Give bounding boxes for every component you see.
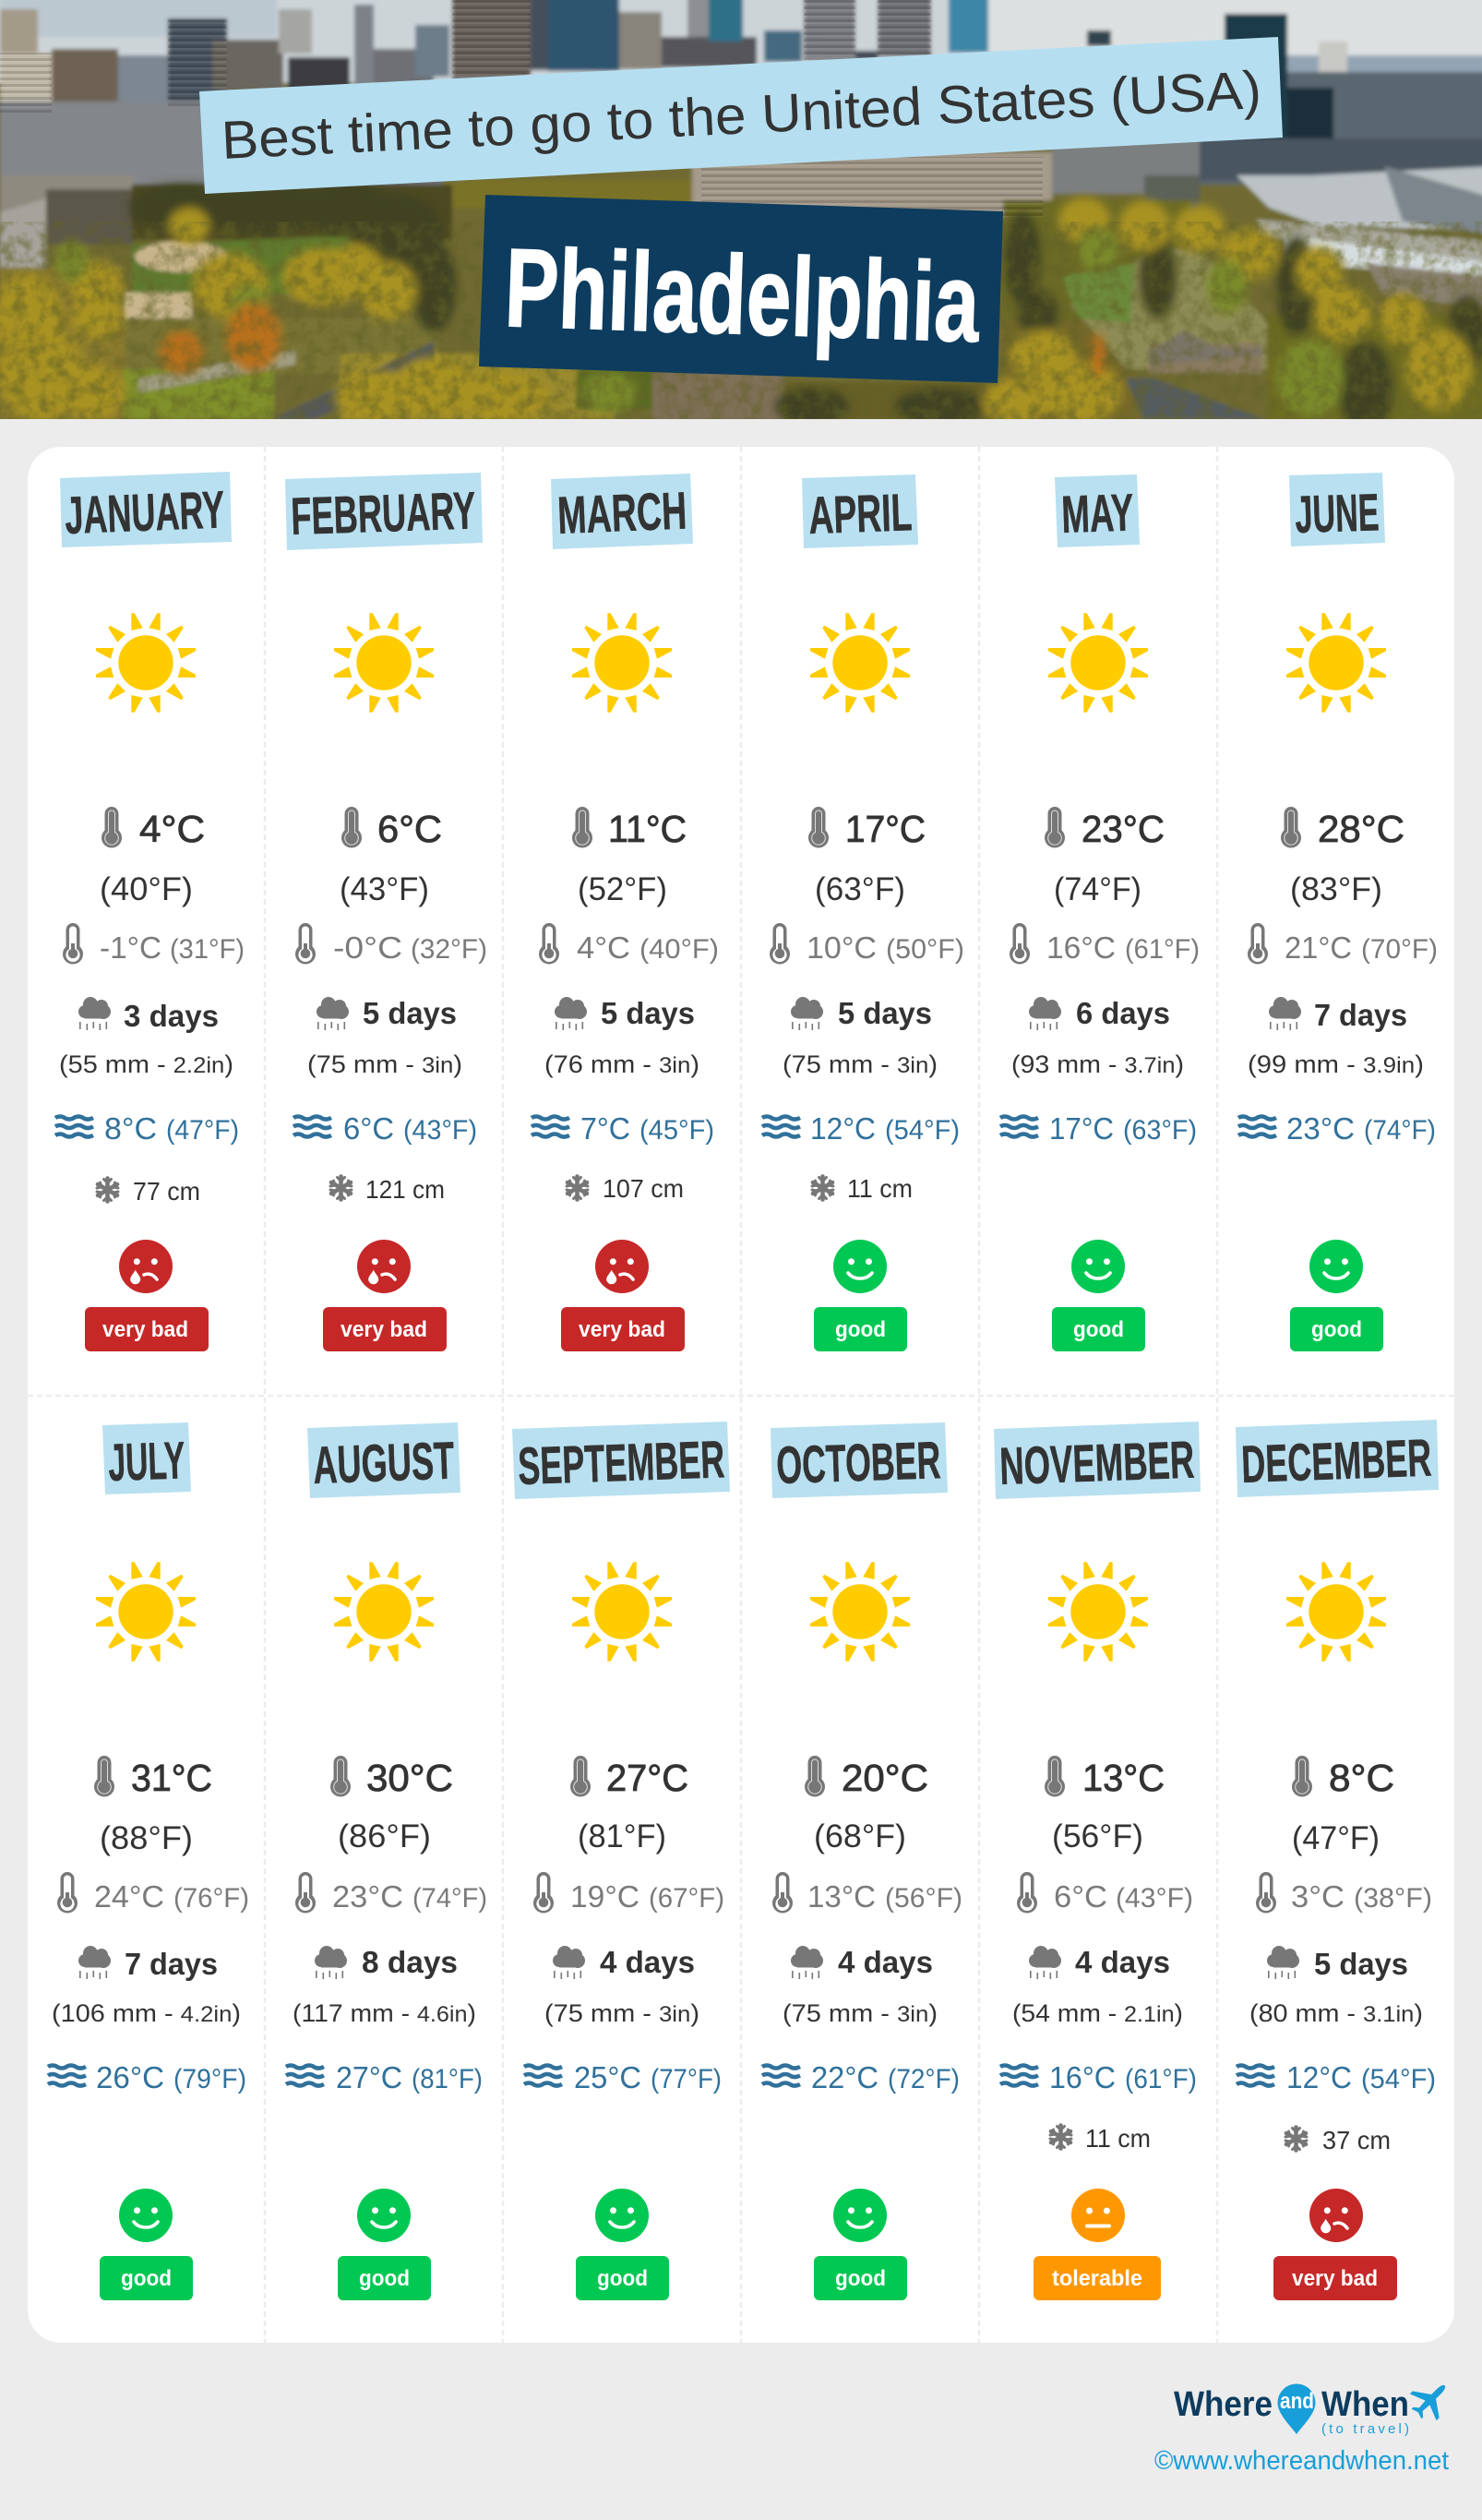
rainfall — [1249, 1946, 1423, 2027]
rating: very bad — [323, 1240, 447, 1351]
average temperature: 28°C — [1318, 808, 1404, 850]
sea temperature: (43°F) — [403, 1115, 477, 1146]
rainfall: (106 mm - 4.2in) — [52, 1999, 241, 2027]
rating: good: good — [1073, 1317, 1124, 1342]
sea temperature: (81°F) — [412, 2064, 483, 2094]
minimum temperature: (31°F) — [170, 934, 245, 965]
icon: sun — [96, 1562, 196, 1662]
rainfall: (117 mm - 4.6in) — [293, 1999, 476, 2027]
icon: sun — [810, 1562, 910, 1662]
icon: sun — [810, 613, 910, 713]
title banner — [199, 37, 1283, 194]
average temperature — [340, 807, 442, 907]
rating: very bad: very bad — [579, 1317, 665, 1342]
month label: May — [1055, 474, 1140, 547]
minimum temperature — [770, 923, 964, 965]
snowfall — [330, 1175, 445, 1204]
sea temperature: 12°C — [1286, 2060, 1352, 2094]
rainfall: (54 mm - 2.1in) — [1012, 1999, 1183, 2027]
minimum temperature: (56°F) — [885, 1883, 962, 1914]
rainfall — [1011, 996, 1184, 1078]
sea temperature — [55, 1111, 239, 1146]
minimum temperature — [57, 1872, 249, 1914]
average temperature: 6°C — [377, 808, 442, 850]
month label: September: SEPTEMBER — [517, 1430, 725, 1496]
snowfall: 121 cm — [365, 1175, 445, 1204]
minimum temperature — [1256, 1872, 1432, 1914]
rating: good — [576, 2189, 669, 2300]
rainfall — [783, 1945, 938, 2027]
sea temperature — [48, 2060, 246, 2094]
rating: good — [100, 2189, 193, 2300]
logo: Where and When (to travel) — [1174, 2372, 1458, 2437]
average temperature — [100, 807, 205, 907]
minimum temperature: (67°F) — [649, 1883, 724, 1914]
month: November — [994, 1422, 1201, 2300]
snowfall — [567, 1174, 684, 1203]
rating: very bad — [1273, 2189, 1397, 2300]
sea temperature: (45°F) — [639, 1115, 714, 1146]
minimum temperature: (70°F) — [1361, 934, 1438, 965]
minimum temperature: (40°F) — [639, 934, 719, 965]
logo: Where and When (to travel): When — [1321, 2385, 1409, 2424]
rainfall — [52, 1946, 241, 2027]
rainfall: (80 mm - 3.1in) — [1249, 1999, 1423, 2027]
minimum temperature: 23°C — [332, 1879, 403, 1914]
average temperature — [94, 1756, 212, 1856]
sea temperature — [286, 2060, 483, 2094]
sea temperature — [762, 2060, 960, 2094]
average temperature: 8°C — [1329, 1757, 1394, 1799]
average temperature: 17°C — [845, 808, 926, 850]
minimum temperature: (43°F) — [1116, 1883, 1193, 1914]
rainfall — [783, 996, 938, 1078]
city name banner — [479, 195, 1003, 383]
month label: July — [102, 1422, 191, 1494]
rating: good: good — [1311, 1317, 1362, 1342]
rainfall: 4 days — [838, 1945, 933, 1979]
rating: very bad: very bad — [1292, 2266, 1378, 2291]
rating: very bad — [561, 1240, 685, 1351]
month: August — [286, 1422, 487, 2300]
sea temperature: 27°C — [336, 2060, 402, 2094]
month: July — [48, 1422, 249, 2300]
rating: good — [814, 1240, 907, 1351]
rating: very bad: very bad — [102, 1317, 188, 1342]
rainfall: (93 mm - 3.7in) — [1011, 1050, 1184, 1078]
average temperature — [330, 1756, 453, 1854]
sea temperature: 16°C — [1049, 2060, 1116, 2094]
average temperature: (63°F) — [815, 870, 905, 907]
sea temperature: (79°F) — [173, 2064, 246, 2094]
icon: sun — [1048, 613, 1148, 713]
rating: tolerable — [1034, 2189, 1161, 2300]
rainfall: 7 days — [1314, 998, 1407, 1032]
month: June — [1238, 473, 1438, 1351]
sea temperature: (54°F) — [885, 1115, 960, 1146]
icon: sun — [334, 613, 434, 713]
rating: tolerable: tolerable — [1052, 2266, 1142, 2291]
average temperature: 11°C — [608, 808, 687, 850]
snowfall — [1285, 2126, 1391, 2154]
minimum temperature: (74°F) — [412, 1883, 487, 1914]
rating: good: good — [597, 2266, 648, 2291]
minimum temperature: -0°C — [333, 930, 402, 965]
snowfall — [97, 1177, 200, 1206]
minimum temperature — [295, 1872, 487, 1914]
rainfall: 5 days — [1314, 1947, 1408, 1981]
minimum temperature — [295, 923, 487, 965]
month label: March: MARCH — [556, 481, 687, 546]
rating: very bad: very bad — [341, 1317, 427, 1342]
month label: September — [512, 1422, 730, 1499]
rainfall: (55 mm - 2.2in) — [59, 1050, 233, 1078]
month: March — [532, 474, 719, 1351]
sea temperature: (74°F) — [1364, 1115, 1436, 1146]
sea temperature: 7°C — [580, 1111, 630, 1146]
rainfall: (76 mm - 3in) — [544, 1050, 699, 1078]
header photo: Philadelphia skyline and parkland — [0, 0, 1482, 434]
minimum temperature: (50°F) — [886, 934, 964, 965]
snowfall: 11 cm — [847, 1174, 913, 1203]
rainfall: 8 days — [362, 1945, 458, 1979]
rainfall — [544, 996, 699, 1078]
month label: August — [307, 1422, 460, 1498]
month label: October — [771, 1422, 948, 1498]
minimum temperature: (38°F) — [1354, 1883, 1432, 1914]
average temperature: (81°F) — [578, 1818, 666, 1854]
sea temperature — [762, 1111, 960, 1146]
sea temperature — [532, 1111, 714, 1146]
sea temperature: 26°C — [96, 2060, 164, 2094]
snowfall: 77 cm — [133, 1177, 200, 1206]
minimum temperature: 6°C — [1054, 1879, 1107, 1914]
rainfall: (75 mm - 3in) — [783, 1050, 938, 1078]
month: May — [1000, 474, 1200, 1351]
sea temperature: (63°F) — [1123, 1115, 1197, 1146]
rainfall: 3 days — [124, 999, 219, 1033]
month label: February: FEBRUARY — [290, 481, 476, 546]
month label: March — [551, 474, 693, 549]
minimum temperature: 13°C — [807, 1879, 876, 1914]
minimum temperature — [772, 1872, 962, 1914]
average temperature: 31°C — [131, 1757, 212, 1799]
minimum temperature: 21°C — [1285, 930, 1352, 965]
month label: May: MAY — [1060, 483, 1134, 545]
sea temperature — [293, 1111, 477, 1146]
snowfall — [1050, 2124, 1151, 2153]
rainfall: (75 mm - 3in) — [783, 1999, 938, 2027]
rainfall: (99 mm - 3.9in) — [1248, 1050, 1424, 1078]
average temperature: 27°C — [606, 1757, 688, 1799]
rating: good — [814, 2189, 907, 2300]
average temperature: 20°C — [842, 1757, 928, 1799]
sea temperature: (61°F) — [1125, 2064, 1197, 2094]
minimum temperature: -1°C — [100, 930, 161, 965]
rainfall: 5 days — [363, 996, 457, 1030]
title banner: Best time to go to the United States (USA) — [220, 60, 1262, 171]
minimum temperature: 4°C — [577, 930, 630, 965]
minimum temperature: 19°C — [570, 1879, 639, 1914]
month: December — [1236, 1420, 1439, 2300]
minimum temperature: 10°C — [807, 930, 877, 965]
rating: very bad — [85, 1240, 209, 1351]
rainfall: 6 days — [1076, 996, 1170, 1030]
average temperature: (43°F) — [340, 870, 429, 907]
sea temperature: (77°F) — [651, 2064, 722, 2094]
minimum temperature: (32°F) — [411, 934, 487, 965]
icon: sun — [1286, 1562, 1386, 1662]
average temperature: (52°F) — [578, 870, 667, 907]
copyright url: ©www.whereandwhen.net — [1154, 2446, 1449, 2476]
icon: sun — [1286, 613, 1386, 713]
month label: January: JANUARY — [64, 480, 225, 546]
average temperature: (74°F) — [1054, 870, 1141, 907]
average temperature: (88°F) — [100, 1819, 193, 1856]
average temperature — [572, 807, 687, 907]
average temperature: (68°F) — [814, 1818, 906, 1854]
month label: April: APRIL — [807, 483, 913, 546]
sea temperature: (47°F) — [166, 1115, 239, 1146]
snowfall: 107 cm — [603, 1174, 684, 1203]
month: April — [762, 474, 964, 1351]
rainfall: 5 days — [838, 996, 932, 1030]
logo: Where and When (to travel): and — [1280, 2389, 1314, 2414]
minimum temperature: 16°C — [1046, 930, 1116, 965]
minimum temperature — [533, 1872, 724, 1914]
average temperature: (83°F) — [1290, 870, 1382, 907]
minimum temperature — [63, 923, 245, 965]
minimum temperature — [1017, 1872, 1193, 1914]
rating: good: good — [359, 2266, 410, 2291]
average temperature: 13°C — [1082, 1757, 1165, 1799]
month label: June: JUNE — [1294, 483, 1380, 545]
sea temperature — [1237, 2060, 1436, 2094]
snowfall — [812, 1174, 913, 1203]
rainfall: (75 mm - 3in) — [307, 1050, 462, 1078]
rainfall: 5 days — [601, 996, 695, 1030]
icon: sun — [1048, 1562, 1148, 1662]
rainfall — [1248, 997, 1424, 1078]
month: February — [285, 473, 487, 1351]
rainfall: (75 mm - 3in) — [544, 1999, 699, 2027]
month label: June — [1289, 473, 1385, 546]
sea temperature: 12°C — [810, 1111, 876, 1146]
snowfall: 11 cm — [1085, 2124, 1151, 2153]
average temperature: (56°F) — [1052, 1818, 1143, 1854]
icon: sun — [334, 1562, 434, 1662]
average temperature — [1045, 807, 1165, 907]
minimum temperature: 3°C — [1291, 1879, 1345, 1914]
rating: good: good — [835, 2266, 886, 2291]
sea temperature: (72°F) — [888, 2064, 960, 2094]
icon: sun — [572, 1562, 672, 1662]
rainfall: 7 days — [125, 1947, 218, 1981]
sea temperature: 17°C — [1049, 1111, 1114, 1146]
rainfall: 4 days — [1075, 1945, 1170, 1979]
sea temperature — [1238, 1111, 1436, 1146]
rating: good — [1052, 1240, 1145, 1351]
minimum temperature: (76°F) — [173, 1883, 249, 1914]
panel: monthly climate table — [28, 447, 1454, 2343]
month: September — [512, 1422, 730, 2300]
month label: November — [994, 1422, 1201, 1499]
average temperature — [570, 1756, 688, 1854]
month label: August: AUGUST — [312, 1431, 455, 1495]
minimum temperature — [1010, 923, 1200, 965]
rating: good — [1290, 1240, 1383, 1351]
month label: January — [60, 472, 232, 547]
minimum temperature: 24°C — [94, 1879, 164, 1914]
month label: November: NOVEMBER — [998, 1431, 1195, 1496]
sea temperature: 25°C — [574, 2060, 641, 2094]
sea temperature — [1000, 1111, 1197, 1146]
month: October — [762, 1422, 962, 2300]
average temperature: 4°C — [139, 808, 205, 850]
sea temperature: (54°F) — [1361, 2064, 1436, 2094]
sea temperature: 8°C — [104, 1111, 157, 1146]
rating: good: good — [835, 1317, 886, 1342]
logo: Where and When (to travel): Where — [1174, 2385, 1273, 2424]
sea temperature — [524, 2060, 722, 2094]
average temperature — [805, 1756, 928, 1854]
month label: July: JULY — [107, 1431, 185, 1493]
average temperature — [1292, 1756, 1394, 1856]
average temperature: (86°F) — [338, 1818, 431, 1854]
rainfall: 4 days — [600, 1945, 695, 1979]
rating: good: good — [121, 2266, 172, 2291]
month: January — [55, 472, 245, 1351]
average temperature: (40°F) — [100, 870, 193, 907]
average temperature — [1281, 807, 1404, 907]
rainfall — [293, 1945, 476, 2027]
minimum temperature: (61°F) — [1125, 934, 1200, 965]
month label: February — [285, 473, 483, 550]
sea temperature: 23°C — [1286, 1111, 1355, 1146]
icon: sun — [96, 613, 196, 713]
rainfall — [1012, 1945, 1183, 2027]
minimum temperature — [539, 923, 719, 965]
rainfall — [544, 1945, 699, 2027]
sea temperature: 6°C — [343, 1111, 394, 1146]
average temperature — [808, 807, 926, 907]
snowfall: 37 cm — [1322, 2126, 1391, 2154]
logo: Where and When (to travel): (to travel) — [1321, 2421, 1409, 2437]
sea temperature: 22°C — [811, 2060, 878, 2094]
rating: good — [338, 2189, 431, 2300]
rainfall — [59, 997, 233, 1078]
city name banner: Philadelphia — [503, 224, 983, 366]
average temperature: 23°C — [1082, 808, 1165, 850]
minimum temperature — [1248, 923, 1438, 965]
rainfall — [307, 996, 462, 1078]
sea temperature — [1000, 2060, 1197, 2094]
average temperature: (47°F) — [1292, 1819, 1380, 1856]
icon: sun — [572, 613, 672, 713]
average temperature: 30°C — [366, 1757, 453, 1799]
month label: April — [802, 474, 918, 548]
average temperature — [1045, 1756, 1165, 1854]
month label: October: OCTOBER — [775, 1431, 941, 1495]
